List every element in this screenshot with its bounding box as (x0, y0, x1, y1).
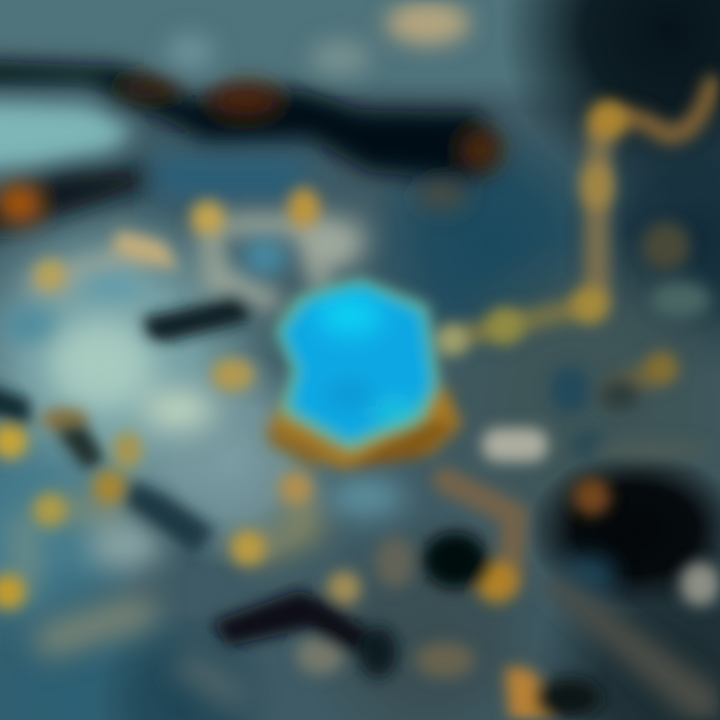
gold circuit nodes: left (0, 188, 361, 675)
brown and orange glows (0, 1, 502, 224)
hexagon highlights (318, 296, 417, 422)
hexagon base: gold glow (265, 385, 462, 470)
dark band across the top (0, 60, 495, 240)
hexagon: glowing blue core (282, 286, 432, 442)
hexagon outer green rim (274, 278, 440, 452)
gold circuit trace: upper right (445, 85, 712, 580)
gold circuit nodes: right (375, 100, 710, 720)
pale glow: lower left highlights (25, 218, 405, 695)
blue band under dark line (150, 155, 310, 200)
dark chips: lower area (0, 366, 640, 718)
panel: light slab top left (0, 100, 135, 172)
trace line lower right (540, 575, 720, 720)
pale circuit links: upper left (40, 225, 340, 300)
pale chips (482, 428, 720, 606)
dark chip: upper centre (142, 298, 252, 342)
blue pocket (2, 239, 287, 343)
blue glow in dark zone (560, 555, 616, 595)
